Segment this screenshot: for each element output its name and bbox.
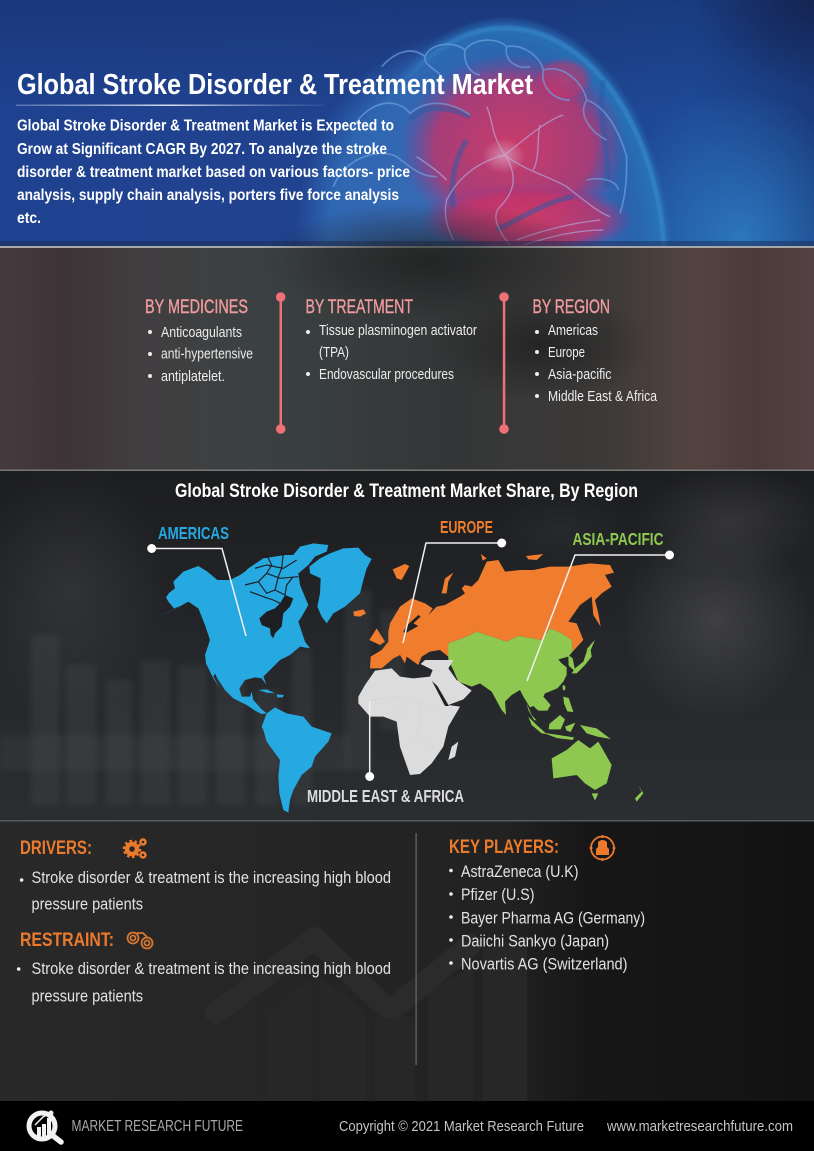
intro paragraph: etc. [17,210,41,227]
map region: americas [159,543,372,813]
block: drivers: pressure patients [32,894,143,914]
icon: gears [124,840,146,858]
block: drivers: Stroke disorder & treatment is the increasing high blood [32,868,391,887]
website: www.marketresearchfuture.com [606,1118,793,1135]
segment: by treatment: (TPA) [319,345,349,361]
block: drivers [20,837,391,914]
segment: by medicines: BY MEDICINES [145,297,248,318]
callout: middle east and africa: MIDDLE EAST & AFRICA [307,786,464,806]
callout: americas [147,523,246,636]
map region: europe and russia [353,554,614,668]
copyright: Copyright © 2021 Market Research Future [339,1118,584,1135]
vertical divider [416,833,417,1065]
callout: europe: EUROPE [440,517,493,537]
segment: by region: Asia-pacific [548,367,612,383]
segment: by treatment: Endovascular procedures [319,367,454,383]
intro paragraph: Global Stroke Disorder & Treatment Market is Expected to [17,118,394,134]
callout: middle east and africa [307,701,464,806]
intro paragraph: Grow at Significant CAGR By 2027. To analyze the stroke [17,141,387,158]
segment: by treatment: BY TREATMENT [306,297,413,318]
intro paragraph: analysis, supply chain analysis, porters five force analysis [17,187,399,204]
panel: footer [0,1101,814,1151]
logo wordmark: MARKET RESEARCH FUTURE [72,1118,243,1135]
block: key players: AstraZeneca (U.K) [461,862,578,881]
block: restraint: RESTRAINT: [20,929,114,951]
segment: by medicines: antiplatelet. [161,369,225,385]
intro paragraph [17,118,410,227]
chart title: Global Stroke Disorder & Treatment Market Share, By Region [175,481,638,502]
callout: americas: AMERICAS [158,523,229,543]
title: Global Stroke Disorder & Treatment Market [17,69,533,101]
block: restraint: Stroke disorder & treatment is the increasing high blood [32,959,391,978]
callout: asia-pacific: ASIA-PACIFIC [572,529,664,549]
segment: by treatment: Tissue plasminogen activator [319,323,477,339]
block: key players [449,835,645,974]
segment: by medicines: anti-hypertensive [161,346,253,362]
callout: europe [403,517,506,643]
divider: second segment separator [499,292,509,434]
panel: market segments [0,202,814,470]
segment: by region: BY REGION [532,297,610,318]
panel: drivers, restraints and key players [0,822,814,1101]
intro paragraph: disorder & treatment market based on various factors- price [17,164,410,181]
segment: by medicines [145,297,253,385]
block: drivers: DRIVERS: [20,837,92,859]
block: key players: KEY PLAYERS: [449,836,559,858]
segment: by region [532,297,658,405]
block: key players: Pfizer (U.S) [461,885,534,904]
block: restraint: pressure patients [32,986,143,1006]
panel: regional map [0,460,814,820]
segment: by region: Middle East & Africa [548,389,658,405]
panel: header banner [0,0,814,528]
map region: middle east and africa [358,660,472,775]
block: key players: Novartis AG (Switzerland) [461,954,628,974]
callout: asia-pacific [527,529,674,681]
segment: by treatment [306,297,477,383]
icon: handcuffs [128,932,152,948]
icon: logo magnifier [29,1110,61,1142]
segment: by region: Europe [548,345,585,361]
illustration: brain in head [295,16,673,528]
block: key players: Bayer Pharma AG (Germany) [461,908,645,928]
block: restraint [17,929,391,1006]
block: key players: Daiichi Sankyo (Japan) [461,932,609,950]
divider: first segment separator [276,292,286,434]
icon: target with people [590,835,616,861]
archipelago channels and hudson bay [245,553,298,638]
segment: by region: Americas [548,323,598,339]
segment: by medicines: Anticoagulants [161,325,242,341]
map region: asia-pacific [448,628,643,802]
